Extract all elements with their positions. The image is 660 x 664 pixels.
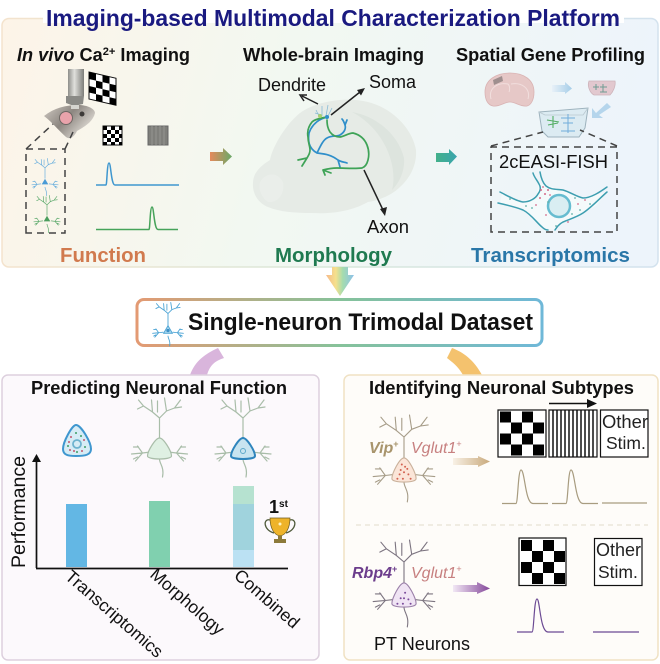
heading: spatial gene profiling: Spatial Gene Profiling	[456, 45, 645, 65]
icon: coronal brain slice	[485, 73, 534, 106]
title: Imaging-based Multimodal Characterization Platform	[46, 5, 620, 31]
chart axes	[32, 454, 288, 568]
dashed FISH box	[491, 130, 617, 232]
label: dendrite: Dendrite	[258, 75, 326, 95]
rbp4 traces	[517, 599, 639, 632]
rbp4 other stimuli box: Other	[596, 540, 641, 560]
vip traces	[502, 470, 647, 504]
heading: in vivo imaging: In vivo Ca	[17, 45, 102, 65]
heading: identifying: Identifying Neuronal Subtypes	[369, 378, 634, 398]
arrow: vip to responses	[453, 456, 490, 467]
panel: identifying neuronal subtypes	[344, 375, 658, 660]
green response trace	[96, 207, 178, 230]
label: Vglut1+ bottom: Vglut1	[411, 565, 456, 582]
dashed zoom box	[26, 124, 73, 233]
label: Vglut1+ bottom: +	[456, 564, 462, 574]
vip other stimuli box: Stim.	[606, 433, 646, 453]
label: morphology: Morphology	[275, 244, 393, 267]
brain silhouette	[253, 100, 416, 213]
icon: small checker stimulus	[103, 126, 122, 145]
vip checker stimulus	[498, 410, 546, 457]
arrow: section to chamber	[592, 103, 611, 118]
label: axon: Axon	[367, 217, 409, 237]
label: Vip+: Vip	[369, 440, 393, 457]
icon: glass chamber	[539, 108, 588, 137]
arrow: rainbow down	[326, 267, 354, 296]
label: Rbp4+: Rbp4	[352, 565, 392, 582]
rbp4 checker stimulus	[519, 538, 566, 586]
label: transcriptomics: Transcriptomics	[471, 244, 630, 267]
label: 2cEASI-FISH: 2cEASI-FISH	[499, 151, 608, 172]
panel: trimodal dataset	[137, 300, 542, 346]
icon: tilted checkerboard stimulus	[89, 72, 116, 105]
x label: morphology: Morphology	[146, 564, 229, 639]
heading: whole-brain imaging: Whole-brain Imaging	[243, 45, 424, 65]
label: first place: st	[279, 499, 289, 510]
icon: tissue section	[588, 81, 615, 95]
heading: in vivo imaging: 2+	[103, 46, 115, 58]
arrow: dendrite	[300, 95, 318, 104]
y axis label: Performance	[8, 456, 30, 568]
arrow: soma	[331, 88, 365, 115]
vip other stimuli box: Other	[602, 412, 648, 432]
icon: green neuron	[34, 196, 60, 233]
vip other stimuli box	[600, 410, 648, 457]
arrow: to subtypes	[447, 348, 482, 375]
icon: FISH cell	[498, 172, 607, 230]
label: function: Function	[60, 244, 146, 267]
icon: blue neuron	[32, 158, 58, 196]
icon: grating stimulus	[148, 126, 168, 145]
icon: morphology neuron	[132, 398, 188, 477]
label: Rbp4+: +	[392, 564, 397, 574]
blue response trace	[96, 163, 179, 185]
icon: trophy	[265, 518, 295, 543]
label: PT neurons: PT Neurons	[374, 634, 470, 654]
icon: combined neuron	[215, 398, 271, 477]
soma cluster	[315, 105, 332, 119]
arrow: function to morphology	[210, 148, 232, 165]
icon: microscope over mouse head	[44, 69, 95, 138]
icon: transcriptomic soma	[63, 425, 91, 456]
bar chart	[66, 486, 254, 567]
label: Vglut1+ top: Vglut1	[411, 440, 456, 457]
arrow: rbp4 to responses	[453, 582, 490, 594]
vip grating stimulus	[549, 410, 597, 457]
rbp4 other stimuli box: Stim.	[598, 562, 638, 582]
heading: predicting: Predicting Neuronal Function	[31, 378, 287, 398]
label: Vglut1+ top: +	[456, 439, 462, 449]
x label: combined: Combined	[230, 565, 304, 632]
icon: dataset neuron	[153, 302, 183, 346]
panel: predicting neuronal function	[2, 375, 319, 662]
morphology: blue axon	[309, 117, 347, 167]
arrow: to prediction	[190, 348, 224, 375]
label: soma: Soma	[369, 72, 417, 92]
rbp4 other stimuli box	[594, 538, 642, 586]
heading: in vivo imaging: Imaging	[115, 45, 190, 65]
icon: vip neuron	[373, 415, 435, 502]
panel: imaging platform	[2, 18, 658, 267]
arrow: axon	[364, 170, 387, 216]
label: first place: 1	[269, 497, 279, 517]
label: dataset: Single-neuron Trimodal Dataset	[188, 309, 533, 336]
arrow: grating motion	[549, 399, 597, 408]
icon: rbp4 neuron	[373, 540, 435, 627]
arrow: morphology to transcriptomics	[436, 149, 457, 165]
morphology: green axon	[298, 117, 369, 175]
x label: transcriptomics: Transcriptomics	[61, 566, 167, 662]
arrow: slice to section	[552, 82, 572, 94]
label: Vip+: +	[393, 439, 399, 449]
